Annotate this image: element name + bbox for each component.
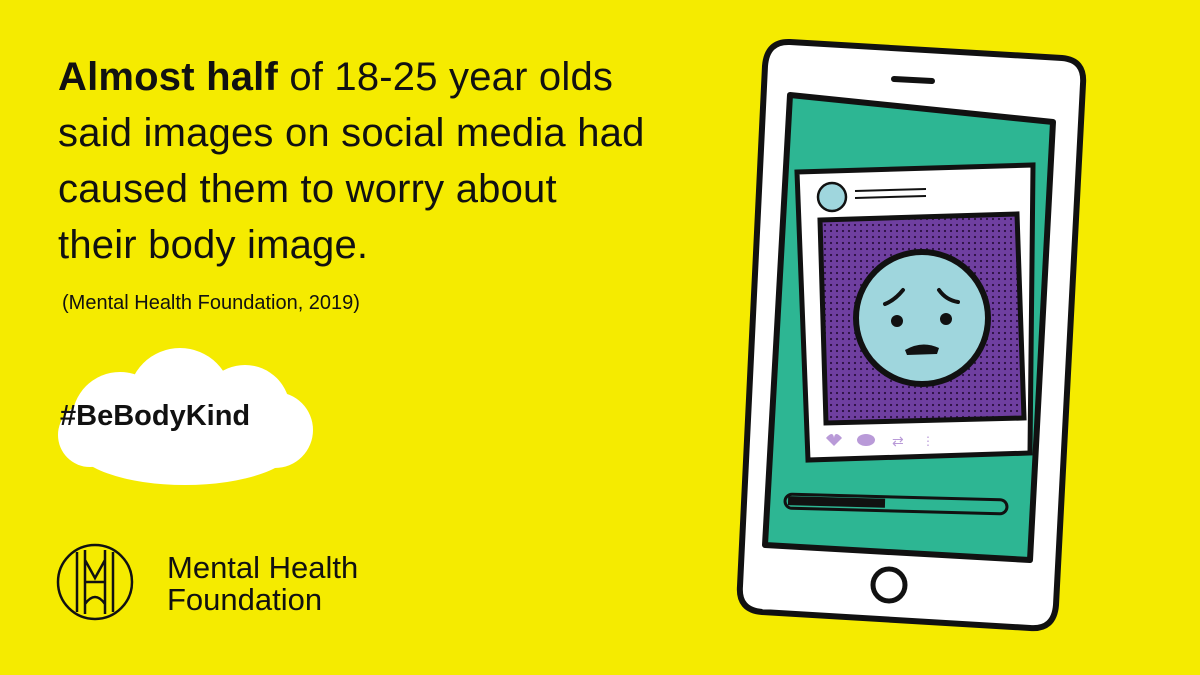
phone body xyxy=(740,42,1083,628)
headline text xyxy=(58,55,645,267)
home button xyxy=(873,569,905,601)
post card xyxy=(797,165,1033,460)
cloud hashtag xyxy=(58,348,313,485)
headline text: caused them to worry about xyxy=(58,167,557,211)
phone illustration xyxy=(736,39,1086,632)
post card: ⇄ xyxy=(892,433,904,449)
cloud hashtag: #BeBodyKind xyxy=(60,400,250,432)
progress bar xyxy=(785,494,1007,514)
headline text: their body image. xyxy=(58,223,368,267)
headline text: said images on social media had xyxy=(58,111,645,155)
logo: Foundation xyxy=(167,582,322,617)
citation: (Mental Health Foundation, 2019) xyxy=(62,292,360,314)
headline text: Almost half of 18-25 year olds xyxy=(58,55,613,99)
post card: ⋮ xyxy=(922,434,934,448)
speaker xyxy=(894,79,932,81)
logo: Mental Health xyxy=(167,550,358,585)
logo xyxy=(56,544,358,620)
